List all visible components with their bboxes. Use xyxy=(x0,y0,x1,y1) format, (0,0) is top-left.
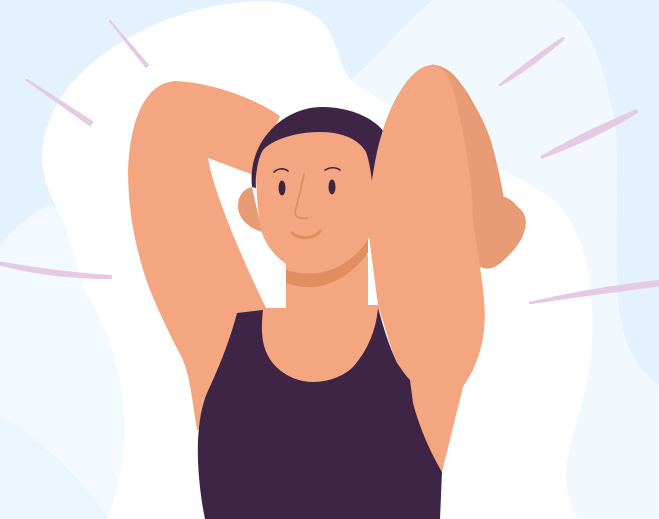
motion line 5 xyxy=(542,111,636,157)
far hand behind head xyxy=(420,65,525,268)
hair xyxy=(252,107,384,188)
left eye xyxy=(278,180,286,196)
motion line 2 xyxy=(27,80,92,125)
neck shadow xyxy=(286,236,368,287)
head xyxy=(252,107,384,273)
bent arm on left xyxy=(128,81,280,430)
motion line 4 xyxy=(500,38,563,85)
nose xyxy=(295,174,307,218)
right eye xyxy=(328,180,336,194)
motion line 3 xyxy=(0,262,111,278)
right brow xyxy=(325,168,340,170)
face xyxy=(256,120,375,273)
neck and chest xyxy=(237,255,400,400)
mouth xyxy=(292,231,320,238)
ear xyxy=(238,187,262,232)
left brow xyxy=(274,169,288,172)
motion line 1 xyxy=(110,21,148,67)
tank top xyxy=(198,308,442,519)
motion line 6 xyxy=(530,281,659,303)
raised arm xyxy=(369,65,485,472)
